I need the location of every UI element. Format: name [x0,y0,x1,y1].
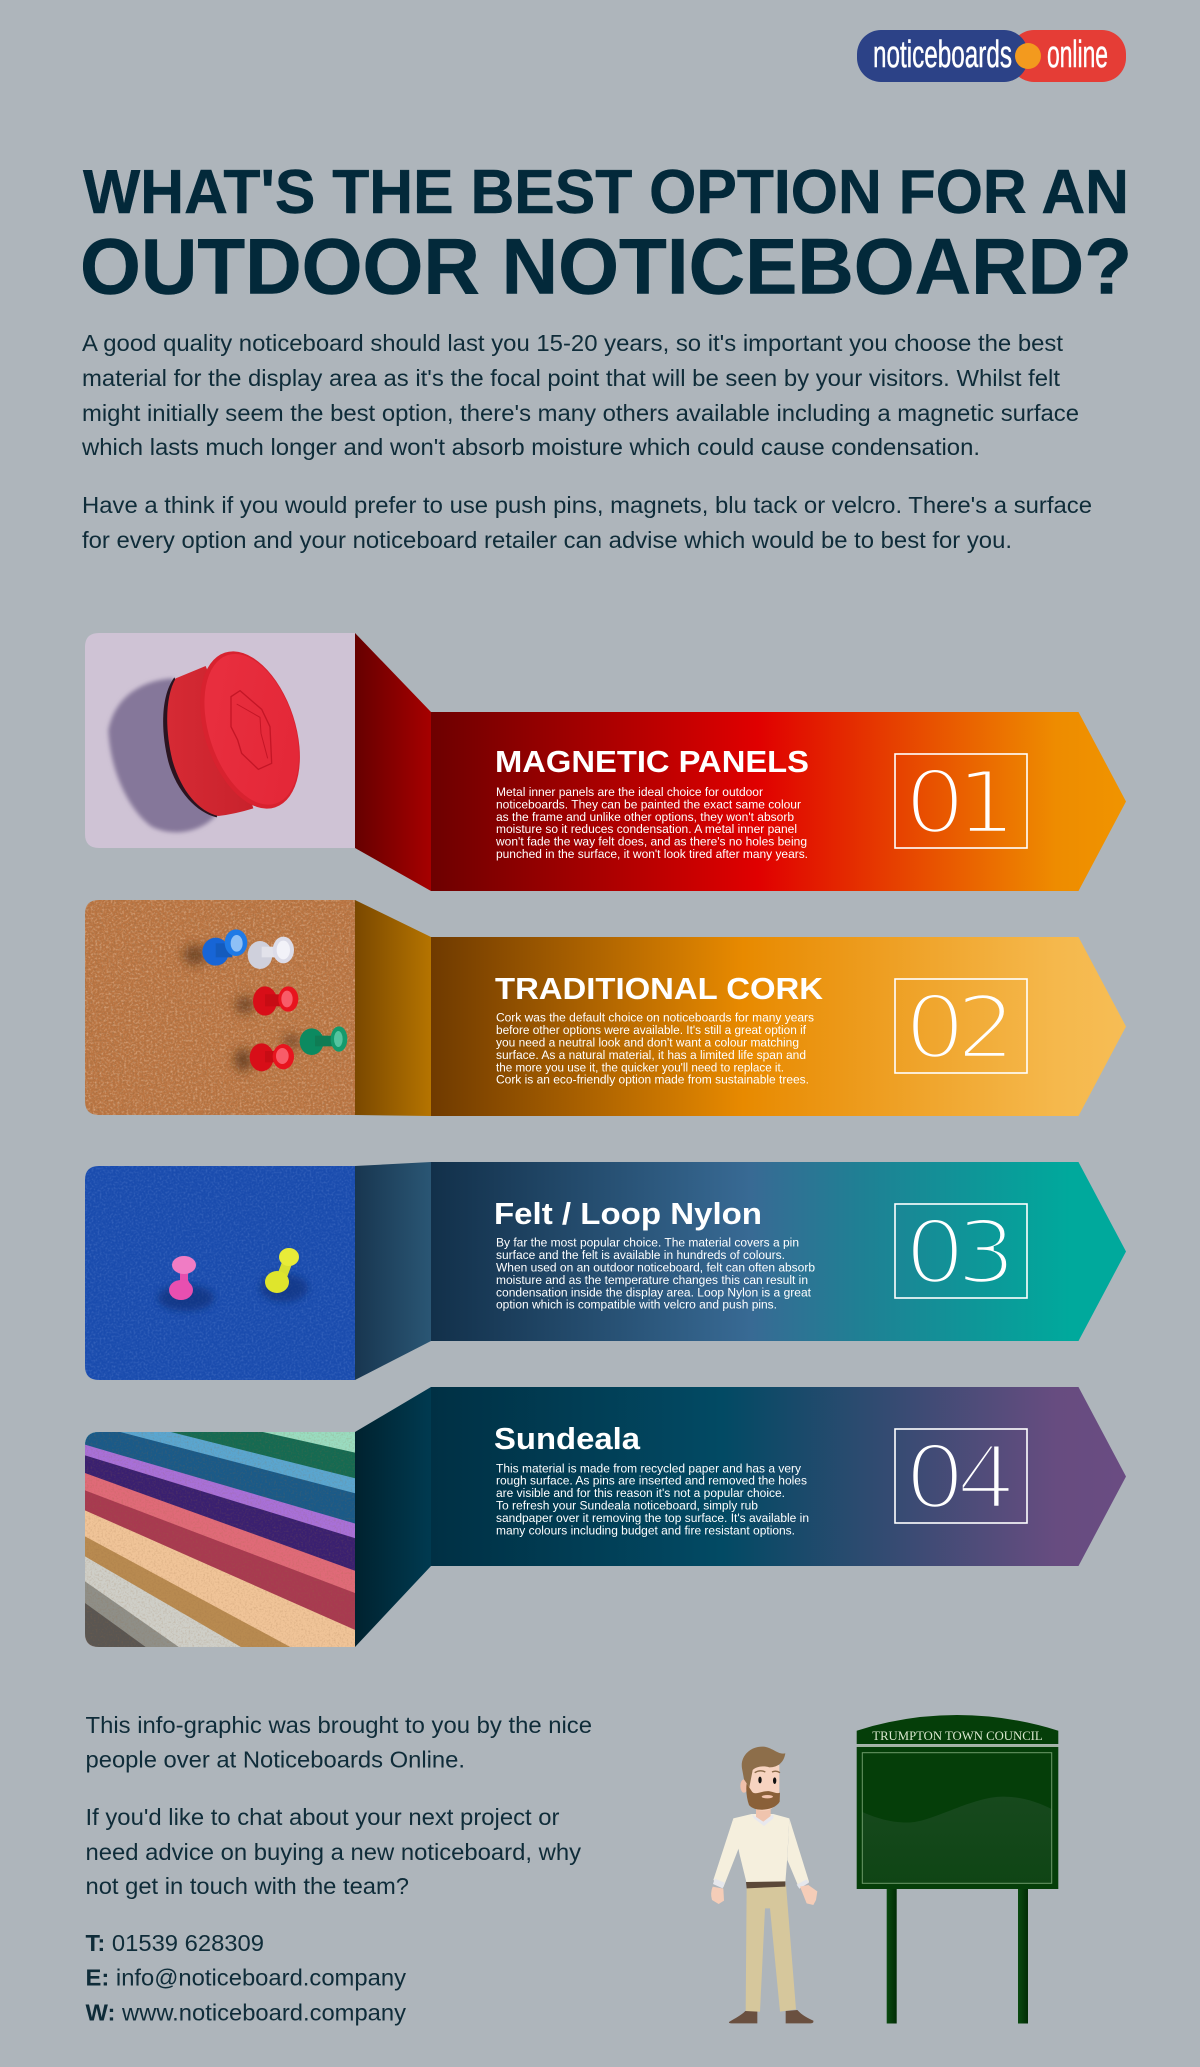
text: felt description [496,1236,815,1312]
text: cork description: the more you use it, the quicker you'll need to replace it. [496,1060,784,1074]
panel: traditional cork [85,900,1126,1116]
text: felt description: moisture and as the temperature changes this can result in [496,1273,808,1287]
fold: sundeala [355,1387,431,1647]
text: magnetic description: punched in the surface, it won't look tired after many years. [496,847,808,861]
closing text block [86,1712,592,1899]
title [80,157,1132,310]
closing text block: people over at Noticeboards Online. [86,1746,465,1772]
title: OUTDOOR NOTICEBOARD? [80,222,1132,310]
text: sundeala description: sandpaper over it removing the top surface. It's available in [496,1511,809,1525]
number box 03: 03 [905,1202,1009,1304]
heading: magnetic panels: MAGNETIC PANELS [495,745,809,779]
contact details [86,1930,407,2026]
posts [887,1889,1028,2024]
arrow: magnetic [431,712,1126,891]
text: sundeala description [496,1461,809,1537]
text: cork description: before other options were available. It's still a great option if [496,1023,807,1037]
logo: noticeboards online: online [1047,34,1108,76]
intro paragraph: A good quality noticeboard should last you 15-20 years, so it's important you choose the best [82,330,1064,356]
logo: noticeboards online [857,30,1126,82]
text: cork description: Cork was the default choice on noticeboards for many years [496,1011,814,1025]
closing text block: This info-graphic was brought to you by the nice [86,1712,592,1738]
board body [857,1747,1058,1889]
text: magnetic description: noticeboards. They can be painted the exact same colour [496,797,801,811]
text: felt description: condensation inside the display area. Loop Nylon is a great [496,1285,812,1299]
illustration: trumpton noticeboard [857,1715,1058,2024]
illustration: man [711,1747,817,2023]
title: WHAT'S THE BEST OPTION FOR AN [83,157,1129,227]
closing text block: need advice on buying a new noticeboard, why [86,1839,582,1865]
panel: sundeala [85,1387,1126,1651]
logo: noticeboards online: noticeboards [873,34,1012,76]
contact details: W: www.noticeboard.company [86,2000,407,2026]
number box 04: 04 [905,1427,1012,1529]
intro second paragraph: for every option and your noticeboard retailer can advise which would be to best for you. [82,527,1012,553]
text: cork description: Cork is an eco-friendly option made from sustainable trees. [496,1073,809,1087]
panel: magnetic panels [85,633,1126,891]
closing text block: If you'd like to chat about your next project or [86,1804,560,1830]
text: magnetic description: moisture so it reduces condensation. A metal inner panel [496,822,797,836]
fold: cork [355,900,431,1116]
heading: felt / loop nylon: Felt / Loop Nylon [494,1197,762,1231]
arrow: sundeala [431,1387,1126,1566]
header arch [857,1715,1058,1744]
photo: blue felt with pins [85,1166,355,1380]
text: cork description: surface. As a natural material, it has a limited life span and [496,1048,806,1062]
text: cork description [496,1011,814,1087]
text: sundeala description: many colours including budget and fire resistant options. [496,1523,795,1537]
photo: cork with push pins [85,900,355,1115]
text: sundeala description: rough surface. As pins are inserted and removed the holes [496,1474,807,1488]
intro paragraph: material for the display area as it's the focal point that will be seen by your visitors. Whilst felt [82,365,1061,391]
panel: felt / loop nylon [85,1162,1126,1380]
closing text block: not get in touch with the team? [86,1873,409,1899]
arrow: felt [431,1162,1126,1341]
intro second paragraph [82,492,1092,553]
intro paragraph: might initially seem the best option, there's many others available including a magnetic surface [82,400,1079,426]
heading: traditional cork: TRADITIONAL CORK [495,972,823,1006]
board header text: TRUMPTON TOWN COUNCIL [872,1729,1043,1743]
text: magnetic description: won't fade the way felt does, and as there's no holes being [495,835,807,849]
number box 02: 02 [905,977,1008,1079]
intro second paragraph: Have a think if you would prefer to use push pins, magnets, blu tack or velcro. There's a surface [82,492,1092,518]
text: sundeala description: To refresh your Sundeala noticeboard, simply rub [496,1498,758,1512]
text: magnetic description: Metal inner panels are the ideal choice for outdoor [496,785,763,799]
intro paragraph: which lasts much longer and won't absorb moisture which could cause condensation. [81,434,980,460]
contact details: E: info@noticeboard.company [86,1965,407,1991]
heading: sundeala: Sundeala [494,1422,641,1456]
text: felt description: option which is compatible with velcro and push pins. [496,1298,777,1312]
contact details: T: 01539 628309 [86,1930,264,1956]
photo: stacked coloured boards [85,1428,357,1651]
text: magnetic description: as the frame and unlike other options, they won't absorb [496,810,794,824]
fold: magnetic [355,633,431,891]
text: cork description: you need a neutral look and don't want a colour matching [496,1036,799,1050]
text: felt description: surface and the felt is available in hundreds of colours. [496,1248,785,1262]
text: sundeala description: are visible and for this reason it's not a popular choice. [496,1486,785,1500]
number box 01: 01 [905,752,1008,854]
text: felt description: When used on an outdoor noticeboard, felt can often absorb [496,1260,815,1274]
arrow: cork [431,937,1126,1116]
text: magnetic description [495,785,808,861]
fold: felt [355,1162,431,1380]
photo: red magnet [85,633,355,848]
text: felt description: By far the most popular choice. The material covers a pin [496,1236,799,1250]
intro paragraph [81,330,1079,460]
text: sundeala description: This material is made from recycled paper and has a very [496,1461,802,1475]
connector bar [857,1744,1058,1747]
